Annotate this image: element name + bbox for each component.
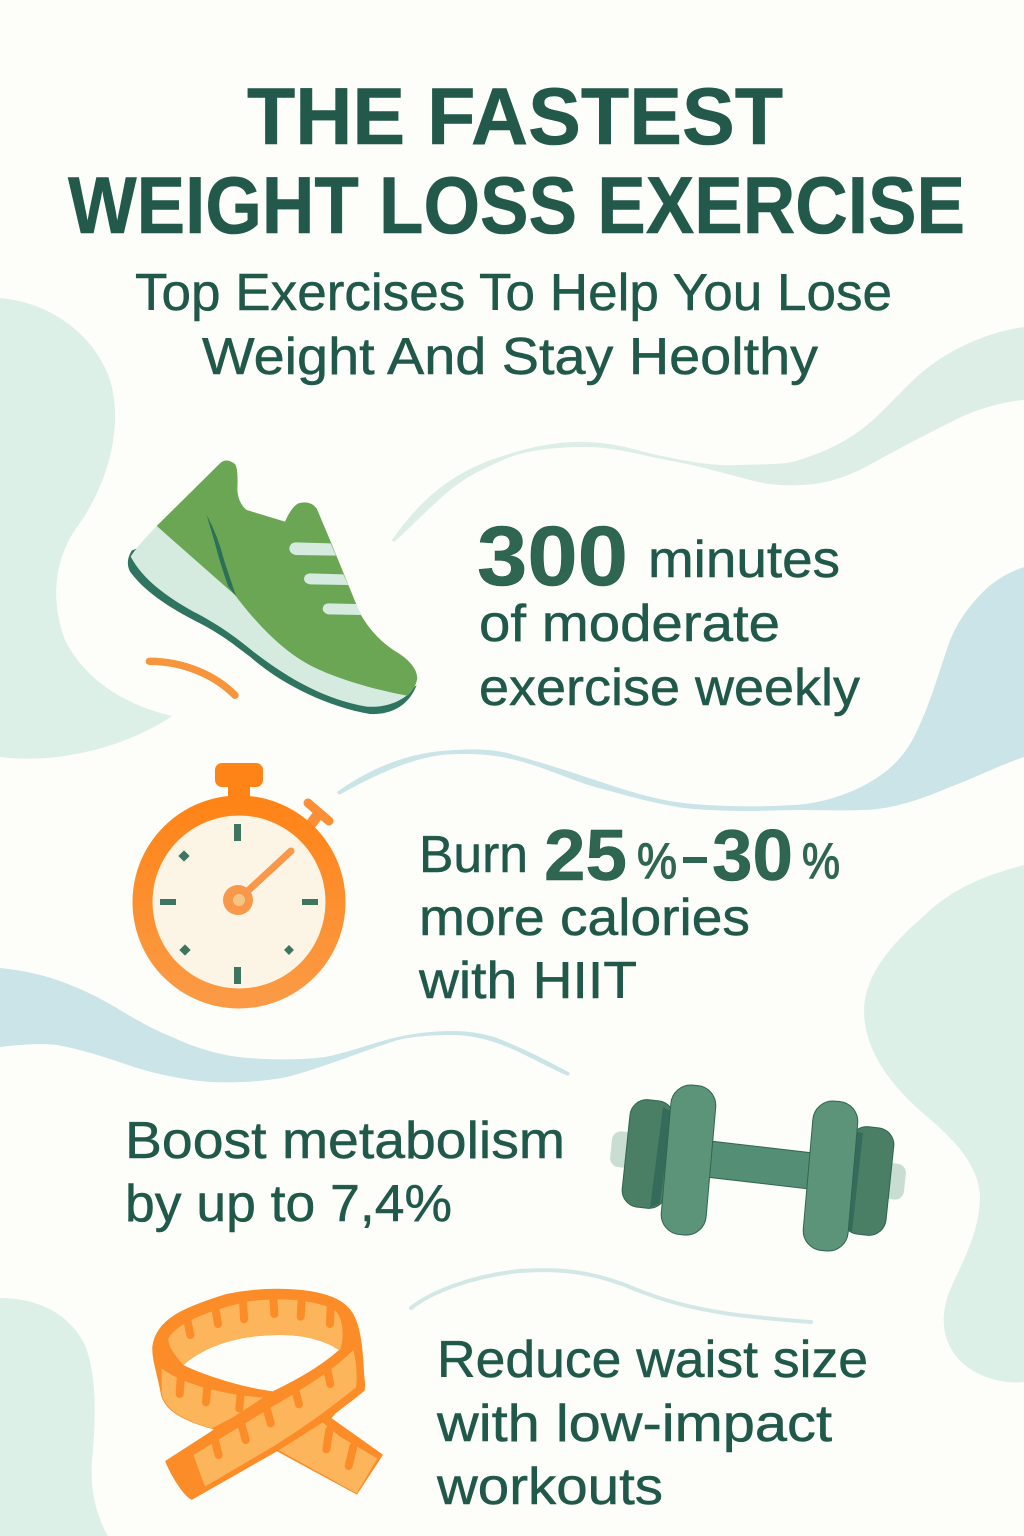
text: boost metabolism	[125, 1112, 565, 1233]
tape back ticks	[180, 1298, 353, 1466]
text: 300 minutes: of moderate	[479, 595, 780, 653]
subtitle: Weight And Stay Heolthy	[202, 328, 818, 386]
title	[68, 72, 965, 251]
text: boost metabolism: Boost metabolism	[125, 1112, 565, 1170]
text: 300 minutes: 300	[477, 509, 628, 603]
text: burn calories: Burn	[419, 826, 528, 884]
dumbbell large plates	[660, 1083, 717, 1237]
icon: dumbbell	[609, 1083, 907, 1253]
text: burn calories: %	[802, 833, 840, 889]
text: burn calories	[418, 816, 840, 1010]
tape back loop and tail	[153, 1290, 382, 1493]
text: reduce waist size: workouts	[436, 1458, 663, 1516]
tape front ticks	[215, 1370, 330, 1455]
shoe outsole	[128, 540, 417, 714]
text: burn calories: with HIIT	[418, 952, 637, 1010]
icon: stopwatch	[142, 763, 336, 998]
dumbbell small plates	[620, 1098, 676, 1210]
text: reduce waist size: with low-impact	[436, 1395, 833, 1453]
title: THE FASTEST	[247, 72, 783, 162]
shoe laces	[289, 542, 362, 615]
text: 300 minutes: exercise weekly	[479, 659, 860, 717]
stopwatch ticks	[160, 824, 318, 984]
stopwatch hand	[238, 851, 291, 900]
icon: measuring tape	[153, 1290, 382, 1498]
motion swoosh	[149, 661, 235, 695]
tape front band	[167, 1345, 364, 1498]
text: boost metabolism: by up to 7,4%	[125, 1175, 452, 1233]
stopwatch side button	[308, 803, 329, 821]
shoe upper	[157, 460, 417, 696]
shoe stripe	[207, 515, 236, 596]
dumbbell end stubs	[609, 1130, 645, 1170]
text: 300 minutes: minutes	[648, 531, 840, 589]
text: 300 minutes	[477, 509, 860, 717]
text: burn calories: 25	[544, 816, 627, 896]
text: burn calories: more calories	[419, 889, 750, 947]
text: burn calories: 30	[712, 816, 793, 896]
icon: running shoe	[128, 460, 417, 714]
subtitle: Top Exercises To Help You Lose	[135, 264, 892, 322]
subtitle	[135, 264, 892, 386]
dumbbell bar	[706, 1141, 813, 1189]
tape lower left band	[162, 1368, 273, 1428]
text: reduce waist size	[436, 1331, 868, 1516]
text: burn calories: %	[637, 833, 677, 889]
text: reduce waist size: Reduce waist size	[437, 1331, 868, 1389]
stopwatch dial	[142, 806, 336, 998]
stopwatch top button	[228, 780, 250, 804]
tape tail band	[278, 1422, 377, 1493]
tape opening	[183, 1335, 339, 1392]
shoe midsole	[131, 526, 407, 707]
tape inner band	[168, 1299, 343, 1365]
